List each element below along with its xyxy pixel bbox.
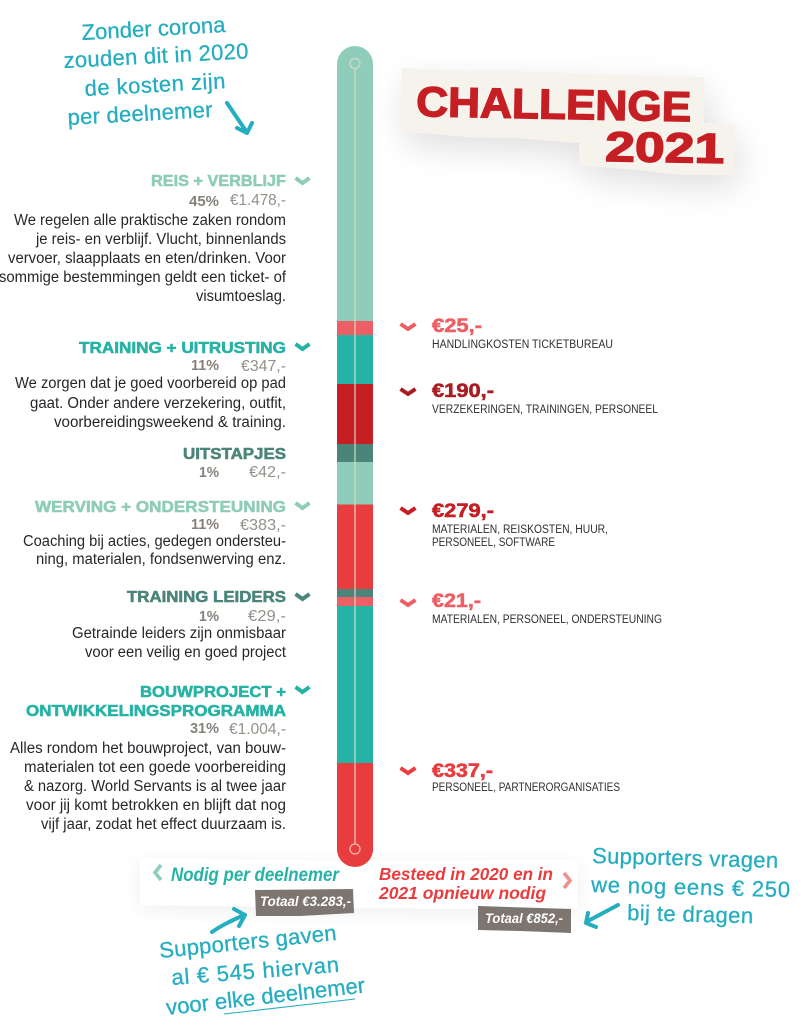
spending: €279 [400, 501, 608, 549]
handwritten note: supporters gaven: Supporters gaven [158, 920, 338, 963]
section: training leiders: Getrainde leiders zijn onmisbaar [72, 625, 286, 642]
section: training + uitrusting: gaat. Onder andere verzekering, outfit, [30, 395, 286, 412]
handwritten note: costs without corona [63, 12, 249, 130]
section: reis + verblijf: 45% [189, 193, 219, 210]
bottom band [140, 858, 578, 909]
section: training + uitrusting [15, 340, 310, 431]
spending: €190: €190,- [432, 381, 494, 402]
section: bouwproject + ontwikkelingsprogramma: BOUWPROJECT + [140, 684, 286, 701]
arrow: to left total [212, 909, 245, 932]
handwritten note: supporters vragen: we nog eens € 250 [590, 872, 790, 902]
section: werving + ondersteuning: Coaching bij acties, gedegen ondersteu- [23, 533, 286, 550]
section: reis + verblijf [0, 173, 310, 305]
arrow: to right total [586, 905, 618, 927]
spending: €25 [400, 316, 613, 351]
arrow: down to the bar [227, 103, 252, 133]
handwritten note: costs without corona: zouden dit in 2020 [63, 38, 249, 73]
section: bouwproject + ontwikkelingsprogramma: ONTWIKKELINGSPROGRAMMA [26, 703, 286, 720]
section: training leiders: 1% [199, 608, 219, 625]
section: bouwproject + ontwikkelingsprogramma: €1.004,- [229, 721, 286, 738]
label: nodig per deelnemer: Nodig per deelnemer [171, 865, 340, 886]
spending: €337: PERSONEEL, PARTNERORGANISATIES [432, 782, 620, 794]
section: reis + verblijf: visumtoeslag. [196, 288, 286, 305]
spending: €337: €337,- [432, 761, 493, 782]
section: training leiders: €29,- [248, 608, 286, 625]
handwritten note: supporters gaven: al € 545 hiervan [170, 952, 340, 990]
handwritten note: supporters vragen: bij te dragen [627, 900, 753, 928]
section: training leiders: voor een veilig en goed project [85, 644, 287, 661]
tag: totaal 3.283: Totaal €3.283,- [260, 894, 351, 909]
tag: totaal 852: Totaal €852,- [485, 911, 563, 926]
section: uitstapjes: UITSTAPJES [183, 446, 286, 463]
section: bouwproject + ontwikkelingsprogramma: vijf jaar, zodat het effect duurzaam is. [41, 816, 286, 833]
section: werving + ondersteuning [23, 499, 310, 568]
handwritten note: costs without corona: de kosten zijn [84, 68, 226, 101]
section: werving + ondersteuning: 11% [191, 516, 219, 533]
bottom ring [350, 844, 360, 854]
handwritten note: supporters gaven: voor elke deelnemer [165, 972, 366, 1020]
spending: €25: €25,- [432, 316, 482, 337]
section: uitstapjes: 1% [199, 464, 219, 481]
handwritten note: costs without corona: Zonder corona [81, 12, 227, 45]
section: training + uitrusting: voorbereidingsweekend & training. [54, 414, 286, 431]
title: Challenge 2021 [400, 68, 735, 175]
section: training + uitrusting: 11% [191, 357, 219, 374]
section: uitstapjes: €42,- [249, 464, 286, 481]
section: uitstapjes [183, 446, 286, 481]
section: bouwproject + ontwikkelingsprogramma: 31% [190, 720, 219, 737]
spending: €190 [400, 381, 659, 416]
handwritten note: costs without corona: per deelnemer [67, 97, 213, 130]
section: bouwproject + ontwikkelingsprogramma: & nazorg. World Servants is al twee jaar [24, 778, 286, 795]
spending: €21: MATERIALEN, PERSONEEL, ONDERSTEUNING [432, 614, 662, 626]
section: werving + ondersteuning: ning, materialen, fondsenwerving enz. [36, 551, 286, 568]
spending: €21: €21,- [432, 591, 481, 612]
spending: €190: VERZEKERINGEN, TRAININGEN, PERSONEEL [432, 404, 659, 416]
section: bouwproject + ontwikkelingsprogramma: materialen tot een goede voorbereiding [24, 759, 286, 776]
section: werving + ondersteuning: WERVING + ONDERSTEUNING [35, 499, 286, 516]
section: bouwproject + ontwikkelingsprogramma: voor jij komt betrokken en blijft dat nog [26, 797, 286, 814]
section: reis + verblijf: je reis- en verblijf. Vlucht, binnenlands [35, 231, 286, 248]
section: training + uitrusting: TRAINING + UITRUSTING [79, 340, 286, 357]
section: reis + verblijf: sommige bestemmingen geldt een ticket- of [0, 269, 287, 286]
section: bouwproject + ontwikkelingsprogramma [10, 684, 310, 833]
label: besteed in 2020: Besteed in 2020 en in [379, 864, 553, 884]
section: werving + ondersteuning: €383,- [240, 517, 286, 534]
section: reis + verblijf: €1.478,- [230, 192, 286, 209]
handwritten note: supporters vragen [590, 843, 790, 928]
spending: €25: HANDLINGKOSTEN TICKETBUREAU [432, 339, 613, 351]
section: reis + verblijf: REIS + VERBLIJF [151, 173, 286, 190]
label: besteed in 2020 [378, 864, 570, 903]
section: training + uitrusting: We zorgen dat je goed voorbereid op pad [15, 375, 286, 392]
handwritten note: supporters vragen: Supporters vragen [592, 843, 778, 873]
spending: €279: MATERIALEN, REISKOSTEN, HUUR, [432, 524, 608, 536]
title: Challenge 2021: CHALLENGE [416, 78, 692, 130]
section: training + uitrusting: €347,- [241, 358, 286, 375]
title: Challenge 2021: 2021 [605, 123, 725, 172]
section: training leiders: TRAINING LEIDERS [127, 589, 286, 606]
handwritten note: supporters gaven [158, 920, 366, 1020]
tag: totaal 3.283 [255, 889, 354, 916]
section: reis + verblijf: We regelen alle praktische zaken rondom [14, 212, 286, 229]
section: bouwproject + ontwikkelingsprogramma: Alles rondom het bouwproject, van bouw- [10, 740, 286, 757]
spending: €279: €279,- [432, 501, 494, 522]
tag: totaal 852 [478, 906, 571, 933]
vertical cost bar [337, 46, 373, 867]
spending: €337 [400, 761, 620, 794]
bar bottom over band [337, 845, 373, 867]
section: reis + verblijf: vervoer, slaapplaats en eten/drinken. Voor [8, 250, 286, 267]
section: training leiders [72, 589, 310, 661]
label: besteed in 2020: 2021 opnieuw nodig [378, 883, 546, 903]
spending: €279: PERSONEEL, SOFTWARE [432, 537, 555, 549]
spending: €21 [400, 591, 662, 626]
